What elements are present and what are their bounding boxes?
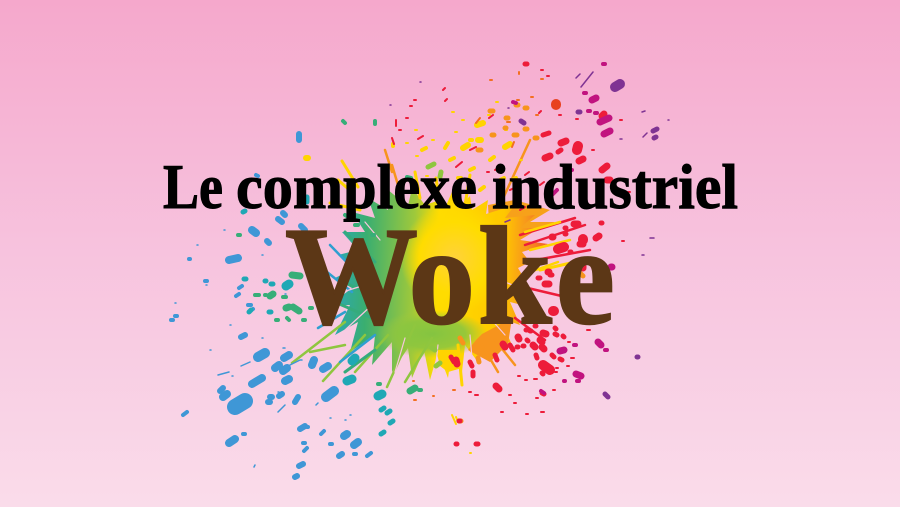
blue splatter — [235, 401, 245, 407]
magenta and purple splatter — [615, 84, 620, 87]
splash core burst — [292, 140, 590, 387]
red splatter — [551, 104, 561, 105]
title word: Woke: Woke — [285, 198, 615, 354]
title line: Le complexe industriel: complexe — [236, 152, 477, 222]
teal and green splatter — [286, 284, 382, 396]
title line: Le complexe industriel: Le — [163, 152, 223, 222]
yellow splatter — [306, 123, 510, 158]
orange splatter — [459, 105, 583, 421]
title line: Le complexe industriel: industriel — [492, 152, 738, 222]
title line: Le complexe industriel — [163, 152, 738, 222]
paint splash — [171, 64, 669, 477]
